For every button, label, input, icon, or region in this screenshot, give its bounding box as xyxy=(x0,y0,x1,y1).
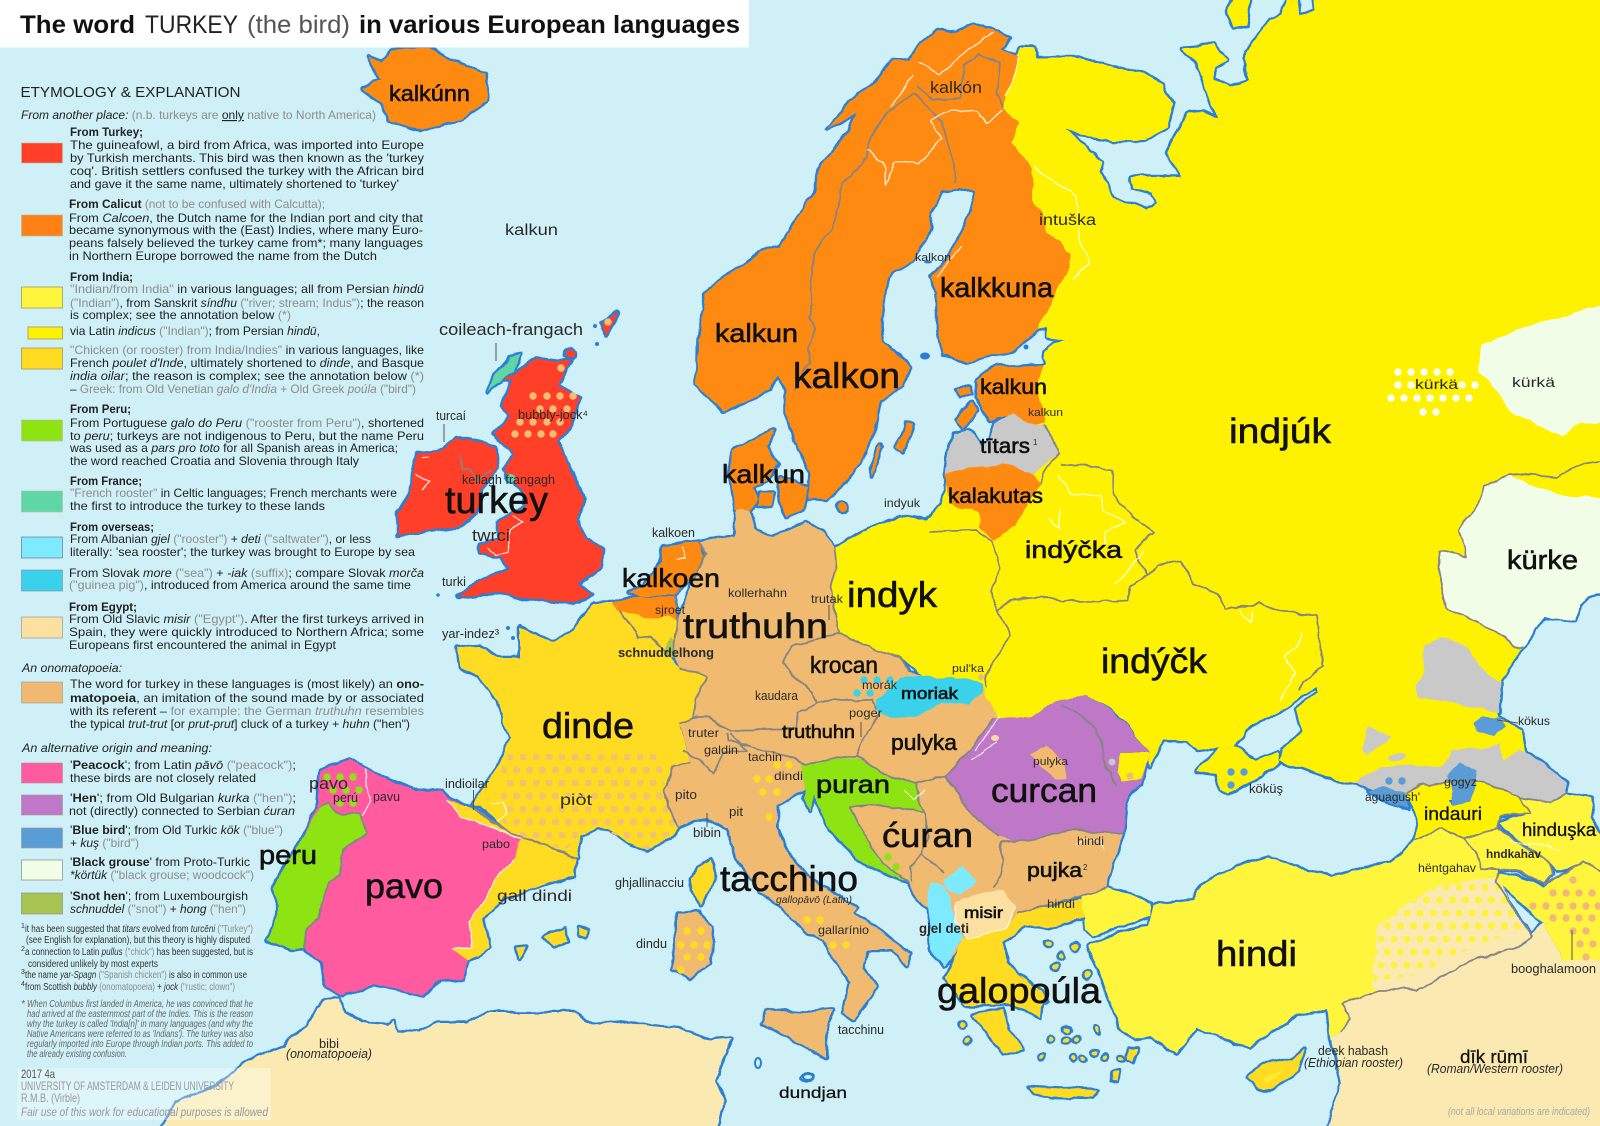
region: Estonia xyxy=(977,365,1045,425)
legend swatch: via Latin xyxy=(28,327,62,339)
label: gall dindi: gall dindi xyxy=(497,888,572,905)
title panel: (the bird) xyxy=(247,11,350,39)
region: Hungarian speaking pocket xyxy=(1028,745,1067,780)
label: dundjan: dundjan xyxy=(779,1085,847,1102)
label: intuška: intuška xyxy=(1039,212,1096,229)
leader lines xyxy=(444,343,1572,960)
legend text: from Calicut xyxy=(69,198,424,263)
region: Aegean islands xyxy=(959,942,1139,1082)
region: Spain xyxy=(268,760,575,995)
credits panel: 2017 4a xyxy=(21,1068,55,1081)
region: Iran xyxy=(1497,862,1600,960)
label: misir: misir xyxy=(964,905,1004,922)
footnotes: the name yar-Spagn ("Spanish chicken") is also in common use xyxy=(25,970,247,981)
region: Romania and Moldova xyxy=(947,695,1150,842)
region: Hebrides xyxy=(487,355,520,393)
label: kalakutas: kalakutas xyxy=(948,485,1043,508)
credits panel: UNIVERSITY OF AMSTERDAM & LEIDEN UNIVERSITY xyxy=(21,1080,234,1093)
white internal language boundaries xyxy=(362,33,1560,950)
annotation: Columbus: had arrived at the easternmost part of the Indies. This is the reason xyxy=(27,1009,253,1020)
legend text: from Turkey: The guineafowl, a bird from Africa, was imported into Europe xyxy=(70,139,424,152)
region: Cyprus xyxy=(1248,1048,1305,1089)
label: gogyz: gogyz xyxy=(1444,775,1477,789)
region: Sicily xyxy=(763,1010,833,1057)
region: Zealand xyxy=(778,477,807,517)
label: gjel deti: gjel deti xyxy=(919,920,969,936)
region: Georgia xyxy=(1407,782,1530,840)
label: moriak: moriak xyxy=(901,684,959,703)
region: Man island xyxy=(507,473,517,481)
legend text: from Peru: was used as a pars pro toto for all Spanish areas in America; xyxy=(69,442,398,455)
label: köküş Crimea: köküş xyxy=(1249,781,1283,796)
overlay: dots in southern France xyxy=(500,752,680,850)
credits panel xyxy=(17,1068,271,1120)
label: hinduşka: hinduşka xyxy=(1522,820,1597,840)
legend swatch: blue bird xyxy=(22,828,62,848)
legend text: from overseas Slovak xyxy=(69,567,425,592)
label: tītars: tītars xyxy=(980,435,1030,458)
label: kökus Kazakhstan side: kökus xyxy=(1518,714,1550,728)
annotation: Columbus: * xyxy=(21,999,26,1010)
label: turki: turki xyxy=(442,574,466,589)
legend text: from Egypt xyxy=(69,601,424,652)
footnotes: a connection to Latin pullus ("chick") has been suggested, but is xyxy=(25,947,253,958)
legend swatch: from India xyxy=(22,287,62,308)
legend text: chicken from India: india oilar ; the reason is complex; see the annotation below (*) xyxy=(70,370,424,383)
region: Novaya Zemlya island xyxy=(1227,0,1253,27)
region: Crimea xyxy=(1197,747,1280,795)
credits panel: Fair use of this work for educational purposes is allowed xyxy=(21,1106,268,1119)
region: Abkhazia blue xyxy=(1367,785,1408,810)
legend text: from Calicut: in Northern Europe borrowed the name from the Dutch xyxy=(69,250,377,263)
label: footnote 2 marker: 2 xyxy=(1083,863,1088,872)
label: indýčka: indýčka xyxy=(1025,537,1123,564)
legend text: from Calicut: peans falsely believed the turkey came from*; many languages xyxy=(69,237,423,250)
legend text: from Peru: the word reached Croatia and Slovenia through Italy xyxy=(70,455,359,468)
label: pavo Spain: pavo xyxy=(365,867,443,906)
footnotes: (see English for explanation), but this theory is highly disputed xyxy=(26,935,250,946)
label: curcan: curcan xyxy=(991,772,1097,810)
label: tachin: tachin xyxy=(748,750,782,764)
region: France xyxy=(457,603,707,857)
legend text: from overseas Albanian xyxy=(70,521,416,559)
region: Malta xyxy=(803,1074,813,1080)
legend text: from France: From France; xyxy=(70,475,142,488)
region: Mallorca xyxy=(545,928,568,947)
legend text: from Turkey: coq'. British settlers confused the turkey with the African bird xyxy=(70,165,424,178)
region: Chechen-Ingush blue xyxy=(1447,762,1477,807)
title panel: in various European languages xyxy=(359,11,740,39)
legend swatch: hen xyxy=(22,795,62,815)
label: (Roman/Western rooster): (Roman/Western rooster) xyxy=(1427,1061,1563,1076)
footnotes: 3 xyxy=(21,969,25,976)
dots: Slovak cyan xyxy=(853,676,894,697)
footnotes xyxy=(21,923,253,993)
region: Kalmykia grey xyxy=(1414,637,1501,713)
label: pulyka small: pulyka xyxy=(1033,756,1069,768)
label: hindi Bulgaria south: hindi xyxy=(1047,897,1075,911)
label: kellagh frangagh: kellagh frangagh xyxy=(462,472,555,487)
legend text: hen: 'Hen'; from Old Bulgarian kurka ("hen") ; xyxy=(70,792,296,805)
region: Armenia xyxy=(1463,827,1553,883)
label: kalkun small Estonia: kalkun xyxy=(1028,407,1063,419)
grey country borders xyxy=(303,53,1600,1033)
legend heading: ETYMOLOGY & EXPLANATION xyxy=(20,84,240,101)
label: pavo Galicia: pavo xyxy=(309,774,348,793)
legend text: from overseas Slovak: ("guinea pig") , introduced from America around the same time xyxy=(69,579,411,592)
label: hëntgahav: hëntgahav xyxy=(1418,861,1476,875)
legend text: from Turkey: by Turkish merchants. This bird was then known as the 'turkey xyxy=(70,152,424,165)
footnotes: 1 xyxy=(21,923,25,930)
legend swatch: from overseas Albanian xyxy=(22,537,62,558)
region: Denmark xyxy=(730,430,778,512)
legend swatch: black grouse xyxy=(22,860,62,880)
label: kalkun Faroe note: kalkun xyxy=(505,222,558,239)
overlay: yellow dots on sand xyxy=(1373,877,1520,987)
region: Ibiza xyxy=(515,947,525,960)
legend text: from Egypt: From Egypt; xyxy=(69,601,137,614)
label: dīk rūmī: dīk rūmī xyxy=(1460,1047,1528,1067)
region: Sardinia xyxy=(673,913,712,978)
legend swatch: from Peru xyxy=(22,420,62,441)
label: pujka: pujka xyxy=(1027,860,1083,882)
label: dindu: dindu xyxy=(636,936,667,951)
label: kalkon Sweden: kalkon xyxy=(793,355,900,396)
label: truthuhn small: truthuhn xyxy=(782,722,855,742)
region: Iceland xyxy=(363,48,488,130)
region: Funen xyxy=(758,493,773,507)
region: Oland xyxy=(870,443,882,475)
annotation: Columbus: why the turkey is called 'India[n]' in many languages (and why the xyxy=(27,1019,253,1030)
label: indyk: indyk xyxy=(847,574,938,615)
label: kalkun Norway: kalkun xyxy=(715,318,798,348)
footnotes: 4 xyxy=(21,981,25,988)
region: Shetland xyxy=(600,312,617,335)
label: poger: poger xyxy=(849,706,882,720)
label: pul'ka: pul'ka xyxy=(952,663,985,675)
section: alternative origin: An alternative origin and meaning: xyxy=(21,742,212,755)
region: Latvia xyxy=(945,415,1060,475)
label: yar-indez: yar-indez³ xyxy=(442,626,500,641)
region: Hiiumaa xyxy=(955,385,972,397)
legend text: peacock: these birds are not closely related xyxy=(70,772,256,785)
region: Caucasus grey xyxy=(1353,742,1567,803)
label: kalkoen: kalkoen xyxy=(622,563,720,593)
region: Eastern Thrace xyxy=(1083,887,1150,935)
legend text: onomatopoeia: The word for turkey in these languages is (most likely) an ono- xyxy=(70,678,424,691)
legend text: hen xyxy=(69,792,296,818)
region: Netherlands xyxy=(630,542,705,597)
region: North Africa xyxy=(145,998,732,1126)
legend text: from France xyxy=(70,475,397,513)
legend text: black grouse xyxy=(70,856,254,882)
region: upper kürkä pale area xyxy=(1478,300,1600,437)
footnotes: from Scottish bubbly (onomatopoeia) + jock ("rustic; clown") xyxy=(25,982,235,993)
label: perú: perú xyxy=(333,790,358,805)
legend text: from Peru xyxy=(69,403,424,468)
legend text: chicken from India: – Greek: from Old Venetian galo d'India + Old Greek poúla ("bird") xyxy=(70,383,416,396)
label: (Ethiopian rooster): (Ethiopian rooster) xyxy=(1304,1055,1403,1070)
legend text: from Turkey: and gave it the same name, ultimately shortened to 'turkey' xyxy=(70,178,399,191)
footnotes: 2 xyxy=(21,946,25,953)
legend text: snot hen: schnuddel ("snot") + hong ("hen") xyxy=(70,903,246,916)
label: ghjallinacciu: ghjallinacciu xyxy=(615,876,684,890)
dots: Italy and Sardinia xyxy=(677,761,850,974)
label: bubbly-jock: bubbly-jock⁴ xyxy=(518,407,588,422)
region: Orkney xyxy=(565,349,575,359)
annotation: Columbus xyxy=(21,999,253,1060)
label: footnote 1 marker: 1 xyxy=(1033,438,1038,447)
legend text: from overseas Albanian: literally: 'sea rooster'; the turkey was brought to Europe by sea xyxy=(70,546,416,559)
legend text: from overseas Albanian: From overseas; xyxy=(70,521,154,534)
legend text: blue bird xyxy=(70,824,283,850)
section: an onomatopoeia: An onomatopoeia: xyxy=(21,662,122,675)
label: gallarínio: gallarínio xyxy=(818,923,869,937)
label: kalkon small: kalkon xyxy=(915,252,951,264)
legend text: from Turkey: From Turkey; xyxy=(70,126,143,139)
legend text: blue bird: 'Blue bird'; from Old Turkic kök ("blue") xyxy=(70,824,283,837)
legend swatch: chicken from India xyxy=(22,348,62,369)
label: galopoúla: galopoúla xyxy=(937,970,1102,1011)
label: indyuk: indyuk xyxy=(884,496,921,510)
label: kalkoen small: kalkoen xyxy=(652,526,695,540)
legend text: from Calicut: From Calcoen , the Dutch name for the Indian port and city that xyxy=(69,212,424,225)
label: tacchinu: tacchinu xyxy=(838,1022,884,1037)
region: Slovakia xyxy=(877,675,983,718)
label: coileach-frangach: coileach-frangach xyxy=(439,320,583,339)
legend swatch: snot hen xyxy=(22,893,62,914)
region: Menorca xyxy=(578,928,588,937)
footnotes: considered unlikely by most experts xyxy=(28,959,158,970)
legend text: peacock xyxy=(70,759,296,785)
region: Middle East xyxy=(1323,923,1600,1126)
legend text: from Peru: From Portuguese galo do Peru ("rooster from Peru") , shortened xyxy=(70,417,424,430)
region: Peloponnese xyxy=(973,1010,1023,1053)
legend text: from Peru: to peru; turkeys are not indigenous to Peru, but the name Peru xyxy=(70,430,424,443)
label: deek habash: deek habash xyxy=(1318,1043,1388,1058)
region: Albania xyxy=(928,883,963,967)
dots: Crimea and Caucasus blue xyxy=(1227,768,1406,789)
label: ćuran: ćuran xyxy=(882,817,973,855)
annotation: Columbus: When Columbus first landed in America, he was convinced that he xyxy=(27,999,253,1010)
region: Turkey xyxy=(1087,827,1533,1053)
dots: Galicia xyxy=(323,773,363,807)
legend swatch: from Egypt xyxy=(22,617,62,638)
label: pulyka: pulyka xyxy=(891,730,958,755)
label: gallopāvō (Latin): gallopāvō (Latin) xyxy=(776,894,852,906)
annotation: Columbus: Native Americans were referred to as 'Indians'). The turkey was also xyxy=(27,1029,253,1040)
region: Ireland xyxy=(398,438,497,535)
label: pavu: pavu xyxy=(373,790,400,804)
label: trutak: trutak xyxy=(811,592,844,606)
region: Crete xyxy=(1028,1087,1097,1098)
label: indioilar: indioilar xyxy=(445,777,489,791)
label: kürke: kürke xyxy=(1507,545,1578,575)
label: pito: pito xyxy=(675,787,697,802)
region: Bornholm xyxy=(839,502,847,512)
label: kürkä left: kürkä xyxy=(1415,376,1458,392)
legend text: via Latin: via Latin indicus ("Indian"); from Persian hindū, xyxy=(70,325,320,338)
label: booghalamoon: booghalamoon xyxy=(1511,961,1596,976)
dots: Bosnia green xyxy=(884,853,900,871)
label: puran: puran xyxy=(816,771,890,799)
label: dindi: dindi xyxy=(774,769,803,783)
legend text: onomatopoeia: the typical trut-trut [or prut-prut] cluck of a turkey + huhn ("hen") xyxy=(70,718,410,731)
region: North Macedonia xyxy=(953,890,1015,940)
region: Corsica xyxy=(690,860,713,907)
label: dinde: dinde xyxy=(542,705,634,746)
legend text: from India: ("Indian"), from Sanskrit síndhu ("river; stream; Indus") ; the reason xyxy=(70,297,424,310)
label: hndkahav: hndkahav xyxy=(1486,849,1542,861)
legend text: from overseas Slovak: From Slovak more ("sea") + -iak (suffix) ; compare Slovak morča xyxy=(69,567,425,580)
label: indauri: indauri xyxy=(1424,804,1482,824)
section: from another place: From another place: (n.b. turkeys are only native to North America) xyxy=(21,109,376,122)
legend text: from Egypt: Spain, they were quickly introduced to Northern Africa; some xyxy=(69,626,424,639)
legend text: chicken from India: French poulet d'Inde , ultimately shortened to dinde, and Basque xyxy=(70,357,424,370)
region: Scandinavia xyxy=(697,25,1072,500)
legend text: blue bird: + kuş ("bird") xyxy=(70,837,139,850)
label: kalkkuna: kalkkuna xyxy=(940,272,1053,303)
legend text: from India: "Indian/from India" in various languages; all from Persian hindū xyxy=(70,283,425,296)
label: piòt: piòt xyxy=(560,792,593,809)
legend text: from Peru: From Peru; xyxy=(70,403,131,416)
legend swatch: from overseas Slovak xyxy=(22,570,62,591)
label: kalkón north: kalkón xyxy=(930,78,982,97)
legend text: hen: not (directly) connected to Serbian ćuran xyxy=(69,805,295,818)
legend text: onomatopoeia: with its referent – for example: the German truthuhn resembles xyxy=(69,705,424,718)
label: pit: pit xyxy=(729,804,743,819)
region: small grey Adygea xyxy=(1362,727,1390,757)
legend text: from France: "French rooster" in Celtic languages; French merchants were xyxy=(70,487,397,500)
region: Great Britain xyxy=(457,358,603,603)
region: Azerbaijan xyxy=(1500,793,1600,885)
region: Kalmyk blue xyxy=(1475,718,1505,735)
legend swatch: from Turkey xyxy=(22,143,62,163)
region: Greece mainland xyxy=(945,900,1088,1017)
dots: Iran orange xyxy=(1529,876,1600,961)
legend text: from overseas Albanian: From Albanian gjel ("rooster") + deti ("saltwater"), or less xyxy=(70,533,371,546)
region: Kürke pale area xyxy=(1440,473,1600,647)
overlay: sand area in eastern Turkey xyxy=(1373,877,1533,990)
label: indýčk: indýčk xyxy=(1101,642,1208,681)
label: bibin: bibin xyxy=(693,825,721,840)
label: galdin: galdin xyxy=(704,743,738,757)
footnotes: it has been suggested that titars evolved from turcēni ("Turkey") xyxy=(25,924,253,935)
region: central tan onomatopoeia area xyxy=(663,510,1123,1020)
legend text: from India xyxy=(70,271,425,322)
legend text: from Egypt: Europeans first encountered the animal in Egypt xyxy=(69,639,337,652)
label: kürkä right: kürkä xyxy=(1512,374,1555,390)
label: kalkúnn: kalkúnn xyxy=(389,81,470,106)
label: kaudara: kaudara xyxy=(755,689,798,703)
region: Euboea xyxy=(1020,975,1047,1003)
legend text: from Calicut: became synonymous with the (East) Indies, where many Euro- xyxy=(69,224,423,237)
legend text: snot hen xyxy=(70,890,248,916)
region: Saaremaa xyxy=(957,403,978,428)
dots: kürkä white xyxy=(1387,368,1479,416)
label: truthuhn: truthuhn xyxy=(683,607,828,646)
region: Russia, Ukraine, Belarus and Poland xyxy=(830,0,1600,800)
legend text: peacock: 'Peacock '; from Latin pāvō ("peacock") ; xyxy=(70,759,296,772)
label: (onomatopoeia): (onomatopoeia) xyxy=(286,1046,372,1061)
region: Catalan gold area xyxy=(447,800,575,962)
region: Belgium xyxy=(610,595,677,620)
legend text: black grouse: *körtük ("black grouse; woodcock") xyxy=(70,869,254,882)
label: indjúk: indjúk xyxy=(1229,412,1332,451)
label: kollerhahn: kollerhahn xyxy=(728,586,787,600)
label: sjroet: sjroet xyxy=(655,603,686,617)
title panel: The word xyxy=(20,11,135,39)
label: twrci: twrci xyxy=(472,526,510,545)
annotation: Columbus: regularly imported into Europe through Indian ports. This added to xyxy=(27,1039,253,1050)
region: Luxembourg xyxy=(665,637,677,658)
region: Portugal xyxy=(268,803,367,950)
label: morák: morák xyxy=(862,678,898,692)
dots: Scotland xyxy=(511,318,612,438)
legend swatch: onomatopoeia xyxy=(22,682,62,703)
legend text: from Turkey xyxy=(70,126,424,191)
legend swatch: from France xyxy=(22,491,62,512)
label: peru: peru xyxy=(259,840,317,870)
label: pabo: pabo xyxy=(482,837,510,851)
region: Kosovo xyxy=(943,867,977,895)
label: truter: truter xyxy=(688,726,719,740)
label: turcaí: turcaí xyxy=(436,408,466,423)
region: Gagauzia yellow xyxy=(1117,753,1150,783)
title panel xyxy=(0,0,749,48)
legend text: from India: From India; xyxy=(70,271,133,284)
legend text: from Egypt: From Old Slavic misir ("Egypt") . After the first turkeys arrived in xyxy=(69,613,424,626)
label: tacchino: tacchino xyxy=(720,858,858,899)
country and language borders xyxy=(303,33,1600,1033)
label: hindi Bulgaria north: hindi xyxy=(1077,834,1104,848)
label: schnuddelhong: schnuddelhong xyxy=(618,645,714,660)
region: Croatia and Slovenia xyxy=(803,757,925,883)
legend text: black grouse: 'Black grouse ' from Proto-Turkic xyxy=(70,856,250,869)
label: bibi: bibi xyxy=(319,1036,339,1051)
legend swatch: from Calicut xyxy=(22,215,62,236)
legend text: chicken from India: "Chicken (or rooster) from India/Indies" in various languages, like xyxy=(70,344,424,357)
title panel: TURKEY xyxy=(145,11,238,39)
legend text: from France: the first to introduce the turkey to these lands xyxy=(70,500,325,513)
legend text: snot hen: 'Snot hen '; from Luxembourgish xyxy=(70,890,248,903)
label: kalkun Denmark: kalkun xyxy=(722,459,805,489)
legend text: from India: is complex; see the annotation below (*) xyxy=(70,309,291,322)
label: hindi Turkey: hindi xyxy=(1216,933,1297,974)
legend text: chicken from India xyxy=(70,344,424,396)
credits panel: R.M.B. (Virble) xyxy=(21,1092,80,1105)
label: krocan: krocan xyxy=(810,652,878,678)
region: small grey oval xyxy=(1389,752,1405,762)
legend panel xyxy=(17,84,425,1120)
legend swatch: peacock xyxy=(22,763,62,783)
legend text: onomatopoeia xyxy=(69,678,424,731)
region: Lithuania xyxy=(945,464,1040,540)
legend text: from Calicut: From Calicut (not to be confused with Calcutta); xyxy=(69,198,325,211)
label: kalkun Estonia: kalkun xyxy=(980,376,1047,399)
label: turkey: turkey xyxy=(445,480,548,522)
legend text: onomatopoeia: matopoeia , an imitation of the sound made by or associated xyxy=(70,692,424,705)
annotation: Columbus: the already existing confusion. xyxy=(27,1049,127,1060)
label: aguagush': aguagush' xyxy=(1365,792,1420,804)
region: Gotland xyxy=(897,423,913,453)
map labels xyxy=(259,78,1597,1118)
misc small dots xyxy=(436,260,1285,1084)
